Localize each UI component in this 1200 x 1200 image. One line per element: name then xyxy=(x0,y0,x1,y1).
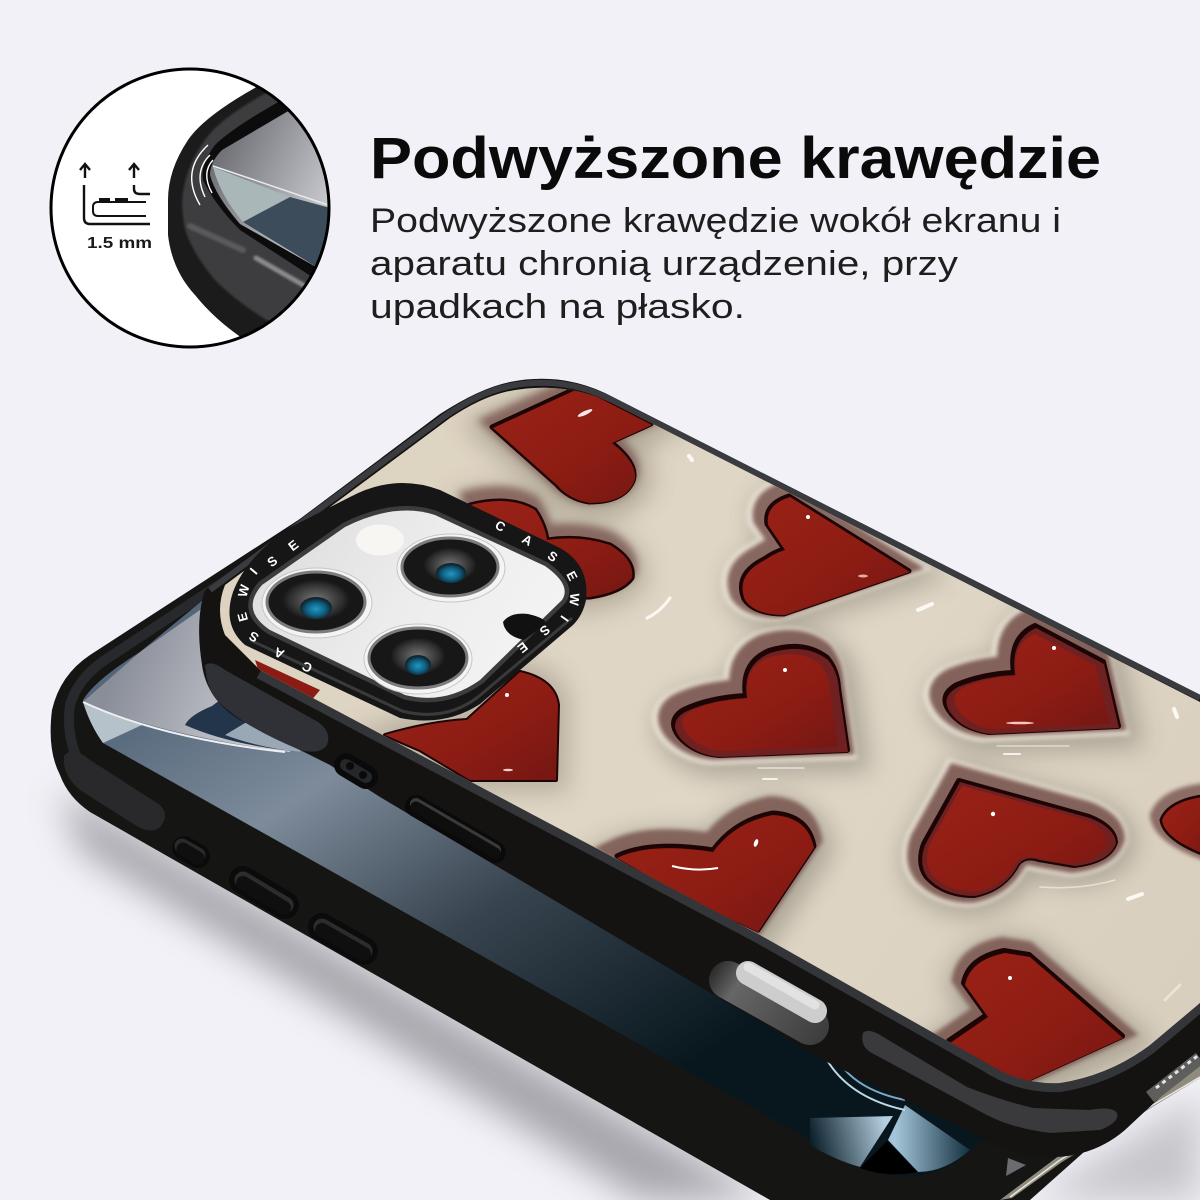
CASEWISE lettering: W xyxy=(566,593,582,607)
back port xyxy=(1006,1158,1026,1176)
lens: left xyxy=(262,568,372,638)
button: back volume down xyxy=(322,927,364,954)
heart: lower right rotated xyxy=(918,777,1116,896)
CASEWISE lettering xyxy=(234,517,582,676)
heading: Podwyższone krawędzie xyxy=(370,126,1101,191)
CASEWISE lettering: E xyxy=(285,537,302,554)
ring lower sheen xyxy=(250,618,572,714)
body text: Podwyższone krawędzie wokół ekranu i xyxy=(370,202,1061,240)
heart: lower centre xyxy=(615,806,814,932)
inset circle: raised edge detail xyxy=(51,60,345,347)
front frame textured bump corner xyxy=(862,1031,1117,1133)
body text: upadkach na płasko. xyxy=(370,288,745,326)
flash xyxy=(356,524,404,556)
screen dark inset xyxy=(185,640,300,752)
heart: top xyxy=(490,382,652,503)
soft shadow under phones xyxy=(60,790,1200,1200)
back case textured bump xyxy=(64,751,165,831)
screen line highlight xyxy=(212,165,328,206)
port metal xyxy=(748,973,815,1011)
heart: centre xyxy=(667,641,848,757)
heart: right xyxy=(938,620,1119,734)
heart: lower left xyxy=(385,672,558,780)
CASEWISE lettering: C xyxy=(492,517,509,535)
screen lighter inset xyxy=(225,690,300,752)
charging port xyxy=(728,967,815,1026)
CASEWISE lettering: W xyxy=(235,582,253,599)
CASEWISE lettering: A xyxy=(519,531,536,549)
glossy highlights xyxy=(647,456,1180,1000)
ring body xyxy=(229,483,586,721)
phone artwork with hearts xyxy=(200,370,1200,1090)
corner screen lower wedge xyxy=(213,167,290,222)
arrow right xyxy=(129,164,139,178)
beige glossy background xyxy=(200,370,1200,1090)
heart: bottom xyxy=(947,947,1123,1085)
corner outer case xyxy=(168,87,270,336)
back phone screen xyxy=(83,520,1010,1176)
microphone hole xyxy=(503,614,546,640)
corner black bezel xyxy=(202,102,314,276)
impact arcs xyxy=(192,145,213,205)
icon: raised edge diagram xyxy=(80,164,150,224)
zoomed phone corner xyxy=(168,87,328,336)
CASEWISE lettering: A xyxy=(271,644,287,662)
edge lines xyxy=(84,185,150,224)
screen grey wallpaper xyxy=(83,540,300,752)
CASEWISE lettering: E xyxy=(234,611,251,623)
camera ring xyxy=(229,483,586,721)
front frame top edge xyxy=(210,383,1200,698)
back case clear corner xyxy=(1000,1060,1200,1200)
heart: behind camera xyxy=(468,493,632,600)
lens: bottom xyxy=(364,624,472,694)
CASEWISE lettering: I xyxy=(558,613,572,624)
front frame lit inner band xyxy=(260,672,1200,1085)
screen light wedge xyxy=(83,702,142,743)
back phone case xyxy=(51,480,1200,1200)
CASEWISE lettering: I xyxy=(247,565,260,577)
CASEWISE lettering: S xyxy=(264,553,281,570)
label: 1.5 mm: 1.5 mm xyxy=(87,235,152,252)
band highlights xyxy=(190,226,243,250)
corner screen dark xyxy=(243,197,328,266)
back case clear edge line xyxy=(1010,1077,1200,1197)
heart: right edge xyxy=(1159,792,1200,856)
circle outline xyxy=(51,69,329,347)
front phone case frame xyxy=(199,379,1200,1157)
back case rim highlight xyxy=(69,505,340,760)
arrow left xyxy=(80,164,90,178)
CASEWISE lettering: S xyxy=(536,622,553,639)
CASEWISE lettering: E xyxy=(563,569,581,584)
front frame body xyxy=(199,379,1200,1157)
body text: aparatu chronią urządzenie, przy xyxy=(370,245,959,283)
right side speaker strip xyxy=(1150,1058,1200,1097)
back case body xyxy=(51,480,1120,1200)
screen bottom lights xyxy=(810,1060,970,1174)
button: front mute switch xyxy=(346,762,367,779)
corner translucent band xyxy=(181,93,310,322)
corner screen upper xyxy=(210,111,328,266)
CASEWISE lettering: S xyxy=(246,628,261,646)
lens: top right xyxy=(397,534,505,602)
CASEWISE lettering: S xyxy=(545,548,561,565)
button: back action xyxy=(182,846,198,858)
device buttons xyxy=(99,198,110,202)
body text xyxy=(370,202,1061,326)
ring inner bevel xyxy=(253,511,565,698)
CASEWISE lettering: C xyxy=(299,658,315,676)
front frame textured bump left xyxy=(205,663,328,752)
port recess xyxy=(728,980,810,1026)
button: front long side xyxy=(416,804,495,853)
button: back volume up xyxy=(243,880,285,908)
screen curve highlight xyxy=(83,702,285,752)
camera window xyxy=(253,511,565,698)
heart: upper right xyxy=(734,491,910,615)
CASEWISE lettering: E xyxy=(514,639,531,656)
heart: sliver behind camera xyxy=(255,660,320,702)
circle backdrop xyxy=(51,69,329,347)
